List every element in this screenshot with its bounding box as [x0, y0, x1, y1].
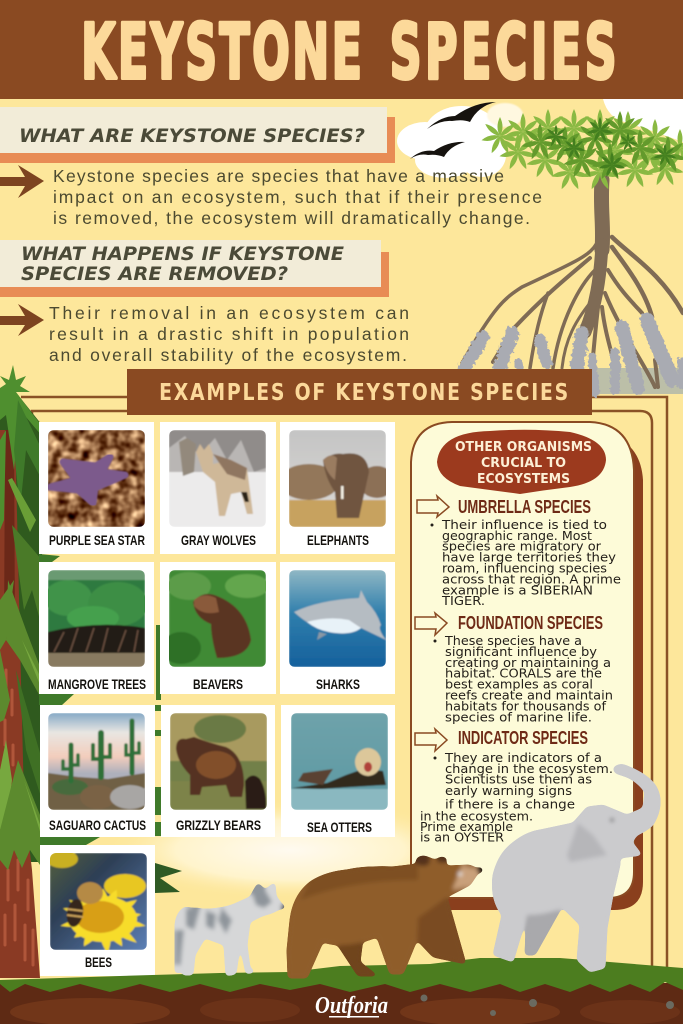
umbrella species: geographic range. Most — [442, 529, 592, 543]
card: sharks — [280, 562, 395, 694]
background glow behind animals — [100, 800, 480, 900]
umbrella species: Their influence is tied to — [441, 518, 607, 532]
indicator species — [420, 728, 613, 844]
frame lines behind examples section — [21, 397, 667, 968]
foundation species: best examples as coral — [445, 678, 593, 692]
oval heading: ECOSYSTEMS — [477, 472, 570, 487]
far back leg — [525, 905, 563, 955]
foundation species: species of marine life. — [445, 710, 592, 724]
card: beavers — [160, 562, 276, 694]
removal text: Their removal in an ecosystem can — [49, 303, 409, 323]
card: saguaro cactus: SAGUARO CACTUS — [49, 817, 146, 833]
card: purple sea star — [39, 422, 154, 554]
oval heading: OTHER ORGANISMS — [455, 440, 592, 455]
heading: what are keystone species — [0, 107, 395, 163]
indicator species: They are indicators of a — [444, 751, 602, 765]
body — [287, 856, 480, 978]
card: bees — [40, 845, 155, 976]
oval heading: CRUCIAL TO — [481, 456, 566, 471]
top tuft — [0, 365, 42, 470]
branch tips in card gaps — [39, 554, 161, 845]
card: gray wolves — [160, 422, 276, 554]
examples banner: EXAMPLES OF KEYSTONE SPECIES — [159, 378, 568, 405]
card: elephants — [279, 422, 395, 554]
title — [81, 7, 617, 96]
umbrella species: species are migratory or — [442, 540, 601, 554]
foundation species — [434, 613, 613, 724]
foliage base — [0, 395, 42, 862]
mangrove tree — [462, 109, 683, 394]
card: sea otters — [281, 705, 395, 837]
indicator species: Prime example — [420, 820, 513, 834]
card: bees: BEES — [85, 954, 112, 970]
removal text — [49, 303, 409, 365]
umbrella species: TIGER. — [441, 594, 485, 608]
trunk — [0, 430, 40, 978]
branch layers — [0, 400, 42, 870]
arrow icon: umbrella — [417, 496, 449, 517]
card: elephants: ELEPHANTS — [307, 532, 369, 548]
indicator species: if there is a change — [445, 798, 575, 812]
body and trunk — [492, 764, 660, 972]
indicator species: in the ecosystem. — [420, 810, 533, 824]
heading: what happens if removed — [0, 240, 389, 297]
card: mangrove trees: MANGROVE TREES — [48, 676, 146, 692]
indicator species: INDICATOR SPECIES — [458, 728, 588, 748]
removal text: result in a drastic shift in population — [49, 324, 409, 344]
definition text: Keystone species are species that have a massive — [53, 166, 504, 186]
card: beavers: BEAVERS — [193, 676, 243, 692]
far hind leg — [333, 938, 378, 976]
animal: wolf — [175, 882, 285, 976]
foundation species: reefs create and maintain — [445, 688, 613, 702]
umbrella species — [430, 497, 621, 608]
animal: elephant — [492, 764, 660, 972]
foundation species: These species have a — [444, 634, 582, 648]
logo: outforia: Outforia — [315, 993, 388, 1019]
indicator species: Scientists use them as — [445, 772, 592, 786]
arrow 1 — [0, 165, 44, 198]
definition text — [53, 166, 542, 228]
far front leg — [417, 897, 466, 964]
card: mangrove trees — [39, 562, 154, 694]
redwood tree — [0, 365, 182, 978]
card: saguaro cactus — [40, 705, 155, 837]
canopy — [481, 109, 683, 190]
water strip — [592, 368, 683, 394]
umbrella species: roam, influencing species — [442, 562, 607, 576]
card: grizzly bears: GRIZZLY BEARS — [176, 817, 261, 833]
arrow 2 — [0, 304, 44, 336]
umbrella species: UMBRELLA SPECIES — [458, 497, 591, 517]
definition text: is removed, the ecosystem will dramatically change. — [53, 208, 530, 228]
heading: what happens if removed: WHAT HAPPENS IF KEYSTONE — [21, 243, 344, 265]
clouds — [397, 99, 683, 178]
removal text: and overall stability of the ecosystem. — [49, 345, 407, 365]
umbrella species: across that region. A prime — [442, 572, 621, 586]
indicator species: change in the ecosystem. — [445, 762, 613, 776]
arrow icon: foundation — [415, 613, 447, 635]
umbrella species: example is a SIBERIAN — [442, 584, 593, 598]
roots — [462, 180, 683, 387]
foundation species: FOUNDATION SPECIES — [458, 613, 603, 633]
card: sharks: SHARKS — [316, 676, 360, 692]
examples banner — [127, 369, 592, 415]
indicator species: is an OYSTER — [420, 830, 504, 844]
card: gray wolves: GRAY WOLVES — [181, 532, 256, 548]
foundation species: habitats for thousands of — [445, 700, 607, 714]
umbrella species: have large territories they — [442, 550, 616, 564]
title: SPECIES — [390, 7, 617, 96]
ground — [0, 958, 683, 1024]
title band — [0, 0, 683, 99]
title: KEYSTONE — [81, 7, 362, 96]
animal: bear — [287, 856, 483, 978]
indicator species: early warning signs — [445, 784, 572, 798]
definition text: impact on an ecosystem, such that if their presence — [53, 187, 542, 207]
oval heading — [437, 430, 606, 494]
bark dashes — [5, 670, 33, 965]
card: purple sea star: PURPLE SEA STAR — [49, 532, 145, 548]
panel: other organisms — [411, 422, 643, 910]
arrow icon: indicator — [415, 729, 447, 751]
foundation species: habitat. CORALS are the — [445, 666, 602, 680]
card: sea otters: SEA OTTERS — [307, 819, 372, 835]
foundation species: creating or maintaining a — [445, 656, 611, 670]
foundation species: significant influence by — [445, 645, 597, 659]
heading: what happens if removed: SPECIES ARE REMOVED? — [21, 263, 288, 285]
birds — [410, 102, 496, 159]
card: grizzly bears — [161, 705, 275, 837]
barnacles — [465, 320, 682, 393]
heading: what are keystone species: WHAT ARE KEYSTONE SPECIES? — [19, 125, 365, 147]
